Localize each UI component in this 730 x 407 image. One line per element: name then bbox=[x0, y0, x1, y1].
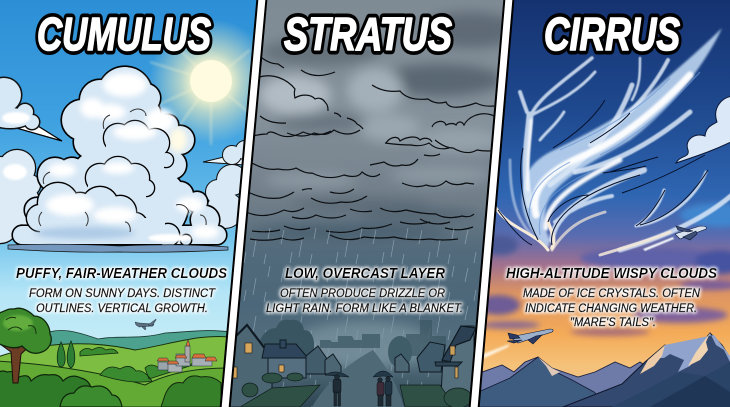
bright wisp core bbox=[527, 75, 690, 228]
title: cirrus: CIRRUS bbox=[544, 8, 680, 60]
main cumulus cloud bbox=[13, 67, 226, 246]
plane lower bbox=[507, 329, 553, 344]
text block: stratus description: LIGHT RAIN. FORM LIKE A BLANKET. bbox=[266, 303, 463, 315]
blue feather gaps bbox=[529, 72, 700, 235]
sunset sky background bbox=[470, 0, 730, 407]
back cloud tower outline bbox=[13, 67, 226, 244]
warm wisp base bbox=[496, 208, 670, 255]
right cumulus patch bbox=[676, 96, 730, 163]
left lower cloud bbox=[0, 150, 40, 243]
panel divider left bbox=[225, 0, 262, 407]
text block: cumulus description bbox=[16, 266, 227, 315]
text block: cirrus description: INDICATE CHANGING WEATHER. bbox=[525, 303, 697, 315]
upper middle lobe bbox=[104, 121, 173, 172]
panel: stratus bbox=[220, 0, 520, 407]
houses left bbox=[224, 325, 341, 407]
village bbox=[157, 339, 217, 372]
bushes on hills bbox=[80, 348, 221, 407]
cloud scallop lines bbox=[246, 58, 502, 240]
front lobe bbox=[27, 183, 192, 246]
cypress trees bbox=[57, 341, 75, 368]
lawns bbox=[240, 373, 472, 407]
dusk cloud streaks bbox=[476, 203, 730, 336]
houses right bbox=[395, 326, 476, 395]
back cloud tower body bbox=[13, 67, 226, 244]
text block: cirrus description bbox=[506, 266, 717, 329]
text block: cumulus description: PUFFY, FAIR-WEATHER CLOUDS bbox=[16, 266, 227, 282]
cloud shading marks bbox=[39, 109, 206, 232]
panel divider right bbox=[474, 0, 509, 407]
cloud base shadow bbox=[8, 244, 228, 252]
contrail upper bbox=[643, 237, 674, 251]
overcast sky background bbox=[220, 0, 515, 407]
back mountains bbox=[474, 357, 660, 407]
green fields bbox=[0, 336, 226, 384]
middle lobe bbox=[84, 156, 156, 198]
title: cirrus: CIRRUS bbox=[544, 8, 680, 60]
title: stratus: STRATUS bbox=[284, 8, 452, 60]
couple with umbrella bbox=[373, 371, 393, 406]
sky background bbox=[0, 0, 256, 356]
text block: cirrus description: HIGH-ALTITUDE WISPY CLOUDS bbox=[506, 266, 717, 282]
foreground bushes bbox=[0, 371, 122, 407]
panel: cirrus bbox=[470, 0, 730, 407]
text block: cumulus description: OUTLINES. VERTICAL GROWTH. bbox=[36, 303, 208, 315]
wisp outlines bbox=[498, 100, 708, 245]
thick wisp strokes bbox=[510, 58, 730, 250]
text block: stratus description: LOW, OVERCAST LAYER bbox=[285, 266, 445, 282]
contrail lower bbox=[478, 344, 510, 360]
cirrus wisps bbox=[496, 28, 730, 255]
plane upper bbox=[675, 226, 706, 240]
icon: sun bbox=[149, 21, 252, 146]
tree bbox=[0, 308, 51, 383]
wet street bbox=[312, 350, 404, 407]
title: cumulus bbox=[35, 13, 214, 55]
title: cumulus: CUMULUS bbox=[37, 8, 211, 60]
lit windows left bbox=[228, 343, 284, 378]
left upper cloud bbox=[0, 78, 62, 141]
far teal hills bbox=[50, 330, 226, 350]
text block: cirrus description: MADE OF ICE CRYSTALS. OFTEN bbox=[523, 288, 701, 300]
soft storm cloud masses bbox=[250, 12, 520, 239]
text block: cumulus description: FORM ON SUNNY DAYS. DISTINCT bbox=[29, 288, 216, 300]
text block: cirrus description: "MARE'S TAILS". bbox=[570, 317, 656, 329]
main wisp mass bbox=[522, 28, 722, 248]
tower highlights bbox=[48, 73, 219, 239]
rain bbox=[244, 228, 476, 407]
right small cloud bbox=[202, 140, 244, 229]
panel: cumulus bbox=[0, 0, 273, 407]
front mountains bbox=[563, 333, 730, 407]
title: stratus: STRATUS bbox=[284, 8, 452, 60]
text block: stratus description bbox=[266, 266, 463, 315]
mid mountains bbox=[474, 357, 610, 407]
text block: stratus description: OFTEN PRODUCE DRIZZLE OR bbox=[280, 288, 445, 300]
title: cumulus: CUMULUS bbox=[37, 8, 211, 60]
foreground meadow bbox=[0, 361, 228, 407]
person with umbrella bbox=[325, 372, 349, 406]
lit windows right bbox=[450, 346, 458, 378]
sky patch behind right cloud bbox=[690, 82, 730, 142]
background trees and skyline bbox=[260, 320, 446, 368]
misty distance bbox=[295, 321, 435, 369]
plane small bbox=[135, 319, 156, 330]
